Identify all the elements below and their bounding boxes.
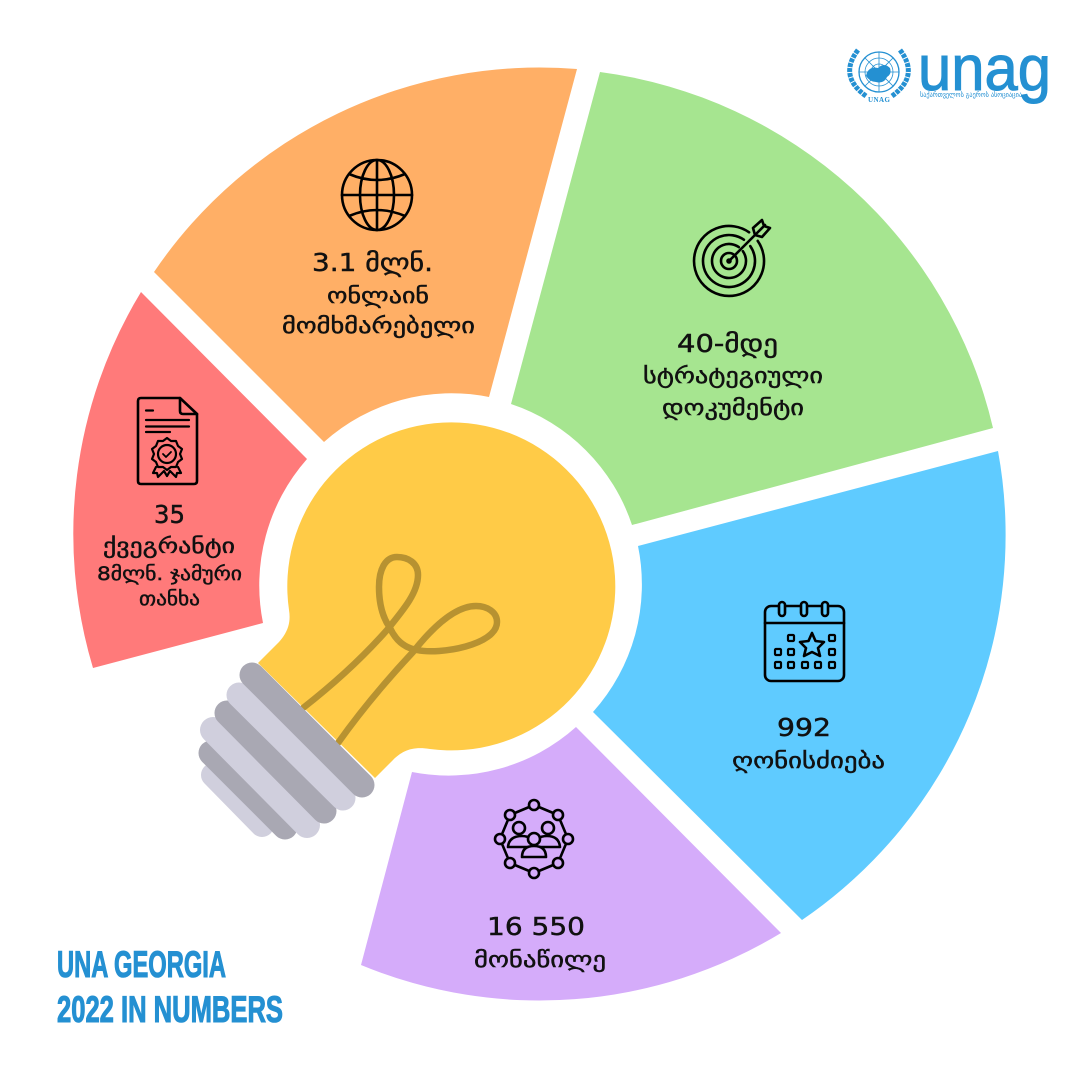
stat: 3.1 million: 3.1 მლნ.: [312, 248, 433, 277]
panel: strategic documents (green): [511, 72, 993, 525]
panel: participants (purple): [361, 727, 781, 1001]
light bulb: [211, 422, 615, 827]
screw base: [211, 675, 362, 827]
stat: 35: 35: [154, 500, 185, 529]
label: sub-grantee: ქვეგრანტი: [103, 534, 235, 558]
label: 8 million total: 8მლნ. ჯამური: [97, 563, 242, 585]
title: 2022 IN NUMBERS: [57, 989, 283, 1030]
logo: UNAG: UNAG: [868, 96, 891, 104]
bulb glass: [258, 422, 615, 778]
icon: people network: [495, 800, 573, 878]
label: online: ონლაინ: [327, 284, 429, 309]
panel: online users (orange): [154, 68, 577, 442]
title: [57, 944, 283, 1030]
icon: target with arrow: [694, 220, 770, 296]
icon: calendar: [765, 602, 844, 681]
label: participant: მონაწილე: [474, 948, 606, 973]
stat: 992: 992: [777, 713, 831, 742]
label: strategic: სტრატეგიული: [643, 364, 823, 389]
label: document: დოკუმენტი: [662, 396, 804, 421]
title: UNA GEORGIA: [57, 944, 226, 985]
icon: globe: [342, 160, 412, 230]
panel: events (blue): [593, 451, 1006, 920]
label: amount: თანხა: [139, 588, 200, 610]
stat: 16 550: 16 550: [487, 912, 585, 941]
logo tagline: საქართველოს გაეროს ასოციაცია: [920, 90, 1022, 99]
logo emblem: [850, 50, 908, 96]
stat: up to 40: 40-მდე: [677, 329, 778, 358]
label: users: მომხმარებელი: [282, 314, 475, 339]
icon: certificate document: [138, 398, 197, 484]
panel: sub-grants (red): [73, 292, 307, 668]
logo: UNAG: [850, 32, 1051, 104]
filament: [303, 557, 497, 743]
label: events: ღონისძიება: [732, 749, 885, 774]
logo wordmark: unag: [918, 32, 1051, 104]
